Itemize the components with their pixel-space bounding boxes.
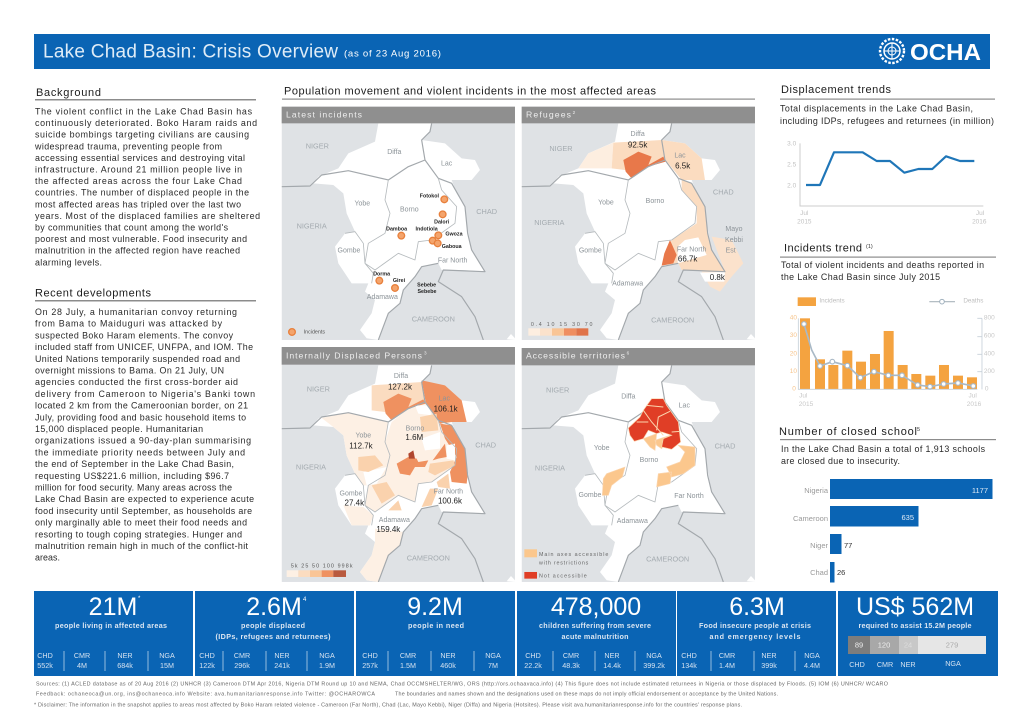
combo chart: 400 bbox=[984, 351, 995, 358]
recent developments paragraph: overnight missions to Bama. On 21 July, UN bbox=[35, 366, 224, 376]
incident place labels: Indotiola bbox=[416, 227, 438, 233]
stat: people displaced: 241k bbox=[274, 661, 290, 670]
background paragraph: most affected areas has tripled over the last two bbox=[35, 199, 241, 209]
refugee choropleth bbox=[578, 140, 743, 292]
map panel: latest incidents: CHAD bbox=[476, 207, 497, 216]
map panel: accessible territories: CAMEROON bbox=[646, 554, 689, 563]
line chart: 2.5 bbox=[787, 162, 797, 169]
map panel: internally displaced persons: NIGER bbox=[307, 384, 330, 393]
stat: people displaced: 122k bbox=[199, 661, 215, 670]
stat: children with severe acute malnutrition: 22.2k bbox=[524, 661, 542, 670]
map panel: accessible territories: Diffa bbox=[621, 394, 636, 401]
line chart: 2.0 bbox=[787, 183, 797, 190]
map panel: internally displaced persons: Adamawa bbox=[379, 517, 410, 524]
line chart: 2016 bbox=[972, 218, 987, 225]
map panel: refugees: 0.8k bbox=[710, 273, 725, 282]
heading: population movement: Population movement and violent incidents in the most affected areas bbox=[284, 86, 656, 98]
combo chart: 20 bbox=[790, 350, 797, 357]
recent developments paragraph: areas. bbox=[35, 553, 60, 563]
footnotes bbox=[34, 682, 888, 708]
map panel: refugees: CHAD bbox=[713, 187, 734, 196]
stat: people displaced bbox=[195, 591, 354, 676]
background paragraph: years. Most of the displaced families are sheltered bbox=[35, 211, 260, 221]
recent developments paragraph: July, providing food and basic household items to bbox=[35, 412, 246, 422]
legend: with restrictions bbox=[539, 560, 589, 566]
map panel: refugees: Refugees bbox=[526, 110, 572, 120]
combo chart: 2015 bbox=[799, 401, 814, 408]
map panel: refugees: Est bbox=[726, 248, 736, 255]
recent developments paragraph: malnutrition remain high in much of the conflict-hit bbox=[35, 541, 249, 551]
stat: people in need: 9.2M bbox=[407, 593, 463, 621]
map panel: accessible territories: Lac bbox=[679, 402, 690, 409]
bar chart: Cameroon bbox=[793, 514, 828, 523]
recent developments paragraph: Lake Chad Basin are expected to experience acute bbox=[35, 494, 254, 504]
line chart bbox=[787, 141, 987, 225]
map panel: internally displaced persons: Far North bbox=[434, 488, 463, 495]
incident place labels: Fotokol bbox=[420, 194, 439, 200]
funding stacked bar: 279 bbox=[946, 640, 958, 650]
stat: people displaced: (IDPs, refugees and returnees) bbox=[216, 632, 331, 641]
map panel: internally displaced persons: 1.6M bbox=[405, 433, 423, 442]
combo chart bbox=[790, 297, 995, 408]
description: Total displacements in the Lake Chad Basin, bbox=[780, 104, 973, 114]
background paragraph: widespread trauma, preventing people from bbox=[34, 141, 222, 151]
header banner bbox=[34, 34, 990, 69]
map panel: internally displaced persons: CAMEROON bbox=[407, 554, 450, 563]
combo chart: Jul bbox=[799, 393, 807, 400]
stat: people in need: 460k bbox=[440, 661, 456, 670]
background paragraph: by communities that count among the world's bbox=[35, 222, 229, 232]
map panel: latest incidents: Yobe bbox=[354, 200, 370, 207]
background paragraph: The violent conflict in the Lake Chad Basin has bbox=[35, 106, 253, 116]
stat: funding required: NER bbox=[900, 660, 916, 669]
stat: people in need: 7M bbox=[488, 661, 498, 670]
access shading bbox=[602, 399, 695, 495]
legend bbox=[528, 322, 593, 336]
heading: Displacement trends bbox=[781, 84, 892, 96]
map panel: latest incidents: Latest incidents bbox=[286, 110, 363, 120]
map panel: refugees bbox=[522, 107, 755, 340]
combo chart: 30 bbox=[790, 332, 797, 339]
recent developments paragraph: the end of September in the Lake Chad Basin, bbox=[35, 459, 234, 469]
panel: incidents trend: (1) bbox=[866, 244, 873, 250]
combo chart: Deaths bbox=[963, 298, 983, 305]
stat: food insecure people: 134k bbox=[681, 661, 697, 670]
map panel: refugees: Diffa bbox=[631, 131, 645, 138]
recent developments paragraph: resorting to tough coping strategies. Hunger and bbox=[35, 529, 242, 539]
stat: food insecure people: 6.3M bbox=[729, 593, 785, 621]
stat: people in affected areas: NGA bbox=[159, 651, 175, 660]
panel: displacement trends: including IDPs, refugees and returnees (in million) bbox=[780, 116, 994, 126]
stat: children with severe acute malnutrition: 14.4k bbox=[603, 661, 621, 670]
map panel: accessible territories bbox=[522, 348, 755, 582]
stat: people displaced: 1.9M bbox=[319, 661, 335, 670]
map panel: latest incidents: NIGERIA bbox=[297, 221, 327, 230]
map panel: internally displaced persons: Borno bbox=[406, 426, 424, 433]
stat: people in affected areas: NER bbox=[117, 651, 133, 660]
legend bbox=[287, 564, 353, 577]
stat: children with severe acute malnutrition: CMR bbox=[563, 651, 579, 660]
panel: background text bbox=[34, 87, 260, 267]
recent developments paragraph: from Bama to Maiduguri was attacked by bbox=[35, 319, 223, 329]
panel: closed schools: 5 bbox=[917, 427, 920, 433]
background paragraph: alarming levels. bbox=[35, 257, 102, 267]
map panel: refugees: Kebbi bbox=[725, 237, 743, 244]
legend bbox=[524, 549, 608, 579]
stat: funding required: required to assist 15.2M people bbox=[858, 621, 972, 630]
map panel: latest incidents: Adamawa bbox=[367, 294, 398, 301]
footnotes: Sources: (1) ACLED database as of 20 Aug 2016 (2) UNHCR (3) Cameroon DTM Apr 2016, Nigeria DTM Round up 10 and NEMA, Chad OCCMSHELTER/WG, ORS (http://ors.ochaavaca.info) (4) This figure does not include estimated returnees in Nigeria or those displaced by Floods. (5) IOM (6) UNHCR/ WCARO bbox=[36, 682, 888, 688]
stat: funding required: US$ 562M bbox=[856, 593, 974, 621]
incident place labels: Damboa bbox=[386, 227, 407, 233]
panel: displacement trends bbox=[780, 84, 995, 225]
stat: people in affected areas: 684k bbox=[117, 661, 133, 670]
combo chart: 200 bbox=[984, 368, 995, 375]
IDP choropleth bbox=[322, 380, 468, 582]
heading: Incidents trend bbox=[784, 242, 862, 254]
incident markers bbox=[376, 196, 448, 291]
stat: food insecure people: and emergency levels bbox=[710, 632, 800, 641]
funding stacked bar: 24 bbox=[904, 640, 912, 650]
map panel: internally displaced persons bbox=[282, 347, 515, 582]
stat: food insecure people bbox=[677, 591, 836, 676]
heading: Background bbox=[36, 87, 101, 99]
map panel: refugees: Yobe bbox=[598, 199, 614, 206]
line chart: Jul bbox=[976, 210, 984, 217]
heading: Recent developments bbox=[35, 288, 152, 300]
icon: UN emblem bbox=[880, 39, 904, 63]
recent developments paragraph: million for food security. Many areas across the bbox=[35, 482, 232, 492]
combo chart: Jul bbox=[968, 393, 977, 400]
stat: people in affected areas: CMR bbox=[74, 651, 90, 660]
recent developments paragraph: the immediate priority needs between July and bbox=[35, 447, 245, 457]
legend: 5k 25 50 100 998k bbox=[291, 564, 353, 570]
stat: people displaced: NGA bbox=[319, 651, 335, 660]
bar chart: 77 bbox=[844, 541, 852, 550]
stat: people in affected areas: * bbox=[138, 596, 141, 602]
background paragraph: infrastructure. Around 21 million people live in bbox=[35, 164, 242, 174]
bar chart: Niger bbox=[810, 541, 828, 550]
date: (as of 23 Aug 2016) bbox=[344, 48, 441, 60]
map panel: accessible territories: 6 bbox=[627, 351, 630, 356]
map panel: latest incidents: Gombe bbox=[338, 248, 361, 255]
map panel: refugees: 92.5k bbox=[628, 140, 647, 149]
map panel: internally displaced persons: Gombe bbox=[340, 490, 363, 497]
map panel: internally displaced persons: 127.2k bbox=[388, 382, 412, 391]
incident place labels bbox=[373, 194, 463, 295]
map panel: accessible territories: NIGER bbox=[546, 386, 569, 395]
stat: children with severe acute malnutrition: CHD bbox=[525, 651, 541, 660]
map panel: internally displaced persons: Lac bbox=[439, 396, 450, 403]
map panel: refugees: NIGER bbox=[549, 144, 573, 153]
panel: incidents trend bbox=[780, 242, 996, 408]
recent developments paragraph: food insecurity until September, as households are bbox=[35, 506, 252, 516]
recent developments paragraph: 15,000 displaced people. Humanitarian bbox=[35, 424, 203, 434]
OCHA logo text: OCHA bbox=[910, 39, 981, 65]
incident place labels: Dorma bbox=[373, 272, 390, 278]
stat: funding required: NGA bbox=[945, 659, 961, 668]
map panel: accessible territories: NIGERIA bbox=[535, 464, 565, 473]
stat: food insecure people: 399k bbox=[761, 661, 777, 670]
stat: people in need: 1.5M bbox=[400, 661, 416, 670]
stat: people in need: 257k bbox=[362, 661, 378, 670]
incident place labels: Girei bbox=[393, 278, 406, 284]
stat: children with severe acute malnutrition: 399.2k bbox=[643, 661, 665, 670]
description: In the Lake Chad Basin a total of 1,913 schools bbox=[781, 444, 986, 454]
background paragraph: continuously deteriorated. Boko Haram raids and bbox=[35, 118, 257, 128]
stat: funding required bbox=[838, 591, 998, 676]
stat: people in affected areas: CHD bbox=[37, 651, 53, 660]
stat: people in affected areas: 552k bbox=[37, 661, 53, 670]
map panel: latest incidents: CAMEROON bbox=[412, 315, 455, 324]
panel: incidents trend: the Lake Chad Basin since July 2015 bbox=[781, 272, 940, 282]
map panel: refugees: Borno bbox=[646, 198, 664, 205]
map panel: refugees: Adamawa bbox=[612, 280, 643, 287]
map panel: latest incidents: Diffa bbox=[387, 149, 402, 156]
map panel: latest incidents: Far North bbox=[438, 258, 468, 265]
incident place labels: Sebebe bbox=[417, 283, 436, 289]
background paragraph: malnutrition in the affected region have reached bbox=[35, 246, 240, 256]
combo chart: 0 bbox=[792, 385, 796, 392]
legend: 0.4 10 15 30 70 bbox=[531, 322, 593, 328]
combo chart: 40 bbox=[790, 315, 797, 322]
combo chart: 0 bbox=[985, 385, 989, 392]
map panel: accessible territories: Accessible territories bbox=[526, 351, 626, 361]
stat: funding required: CHD bbox=[849, 660, 865, 669]
stat: people displaced: NER bbox=[274, 651, 290, 660]
stat: children with severe acute malnutrition: NER bbox=[604, 651, 620, 660]
bar chart: Chad bbox=[810, 568, 828, 577]
stat: children with severe acute malnutrition: acute malnutrition bbox=[562, 632, 628, 641]
map panel: accessible territories: Gombe bbox=[579, 492, 602, 499]
map panel: refugees: Far North bbox=[677, 246, 707, 253]
map panel: internally displaced persons: 100.6k bbox=[438, 496, 462, 505]
map panel: internally displaced persons: 27.4k bbox=[345, 499, 364, 508]
map panel: internally displaced persons: 159.4k bbox=[376, 525, 400, 534]
stat: food insecure people: 1.4M bbox=[719, 661, 735, 670]
map panel: accessible territories: Far North bbox=[674, 493, 704, 500]
map panel: latest incidents: Lac bbox=[441, 160, 453, 167]
background paragraph: the affected areas across the four Lake Chad bbox=[35, 176, 242, 186]
stat: people displaced: CMR bbox=[234, 651, 250, 660]
legend: Not accessible bbox=[539, 573, 587, 579]
legend: Incidents bbox=[304, 330, 325, 336]
map panel: latest incidents: Borno bbox=[400, 207, 419, 214]
title: Lake Chad Basin: Crisis Overview bbox=[43, 42, 338, 62]
recent developments paragraph: agencies conducted the first cross-border aid bbox=[35, 377, 238, 387]
stat: food insecure people: CHD bbox=[681, 651, 697, 660]
recent developments paragraph: only marginally able to meet their food needs and bbox=[35, 518, 247, 528]
stat: food insecure people: 4.4M bbox=[804, 661, 820, 670]
recent developments paragraph: On 28 July, a humanitarian convoy returning bbox=[35, 307, 237, 317]
footnotes: Feedback: ochaneoca@un.org, ins@ochaneoca.info Website: ava.humanitarianresponse.info Twitter: @OCHAROWCA bbox=[36, 692, 375, 698]
combo chart: Incidents bbox=[819, 298, 845, 305]
map panel: accessible territories: CHAD bbox=[715, 442, 735, 451]
map panel: accessible territories: Yobe bbox=[594, 445, 610, 452]
recent developments paragraph: delivery from Cameroon to Nigeria's Banki town bbox=[35, 389, 255, 399]
bar chart: Nigeria bbox=[804, 486, 829, 495]
recent developments paragraph: requesting US$221.6 million, including $96.7 bbox=[35, 471, 229, 481]
stat: funding required: CMR bbox=[877, 660, 893, 669]
stat: food insecure people: NGA bbox=[804, 651, 820, 660]
background paragraph: poorest and most vulnerable. Food insecurity and bbox=[35, 234, 247, 244]
map panel: internally displaced persons: Diffa bbox=[394, 373, 408, 380]
combo chart: 10 bbox=[790, 368, 797, 375]
stat: people displaced: 296k bbox=[234, 661, 250, 670]
panel: recent developments bbox=[35, 288, 256, 563]
stat: food insecure people: Food insecure people at crisis bbox=[699, 621, 811, 630]
background paragraph bbox=[34, 106, 260, 267]
incident place labels: Gwoza bbox=[445, 232, 463, 238]
stat: children with severe acute malnutrition: children suffering from severe bbox=[539, 621, 651, 630]
stat: people in need: people in need bbox=[408, 621, 464, 630]
map panel: refugees: Gombe bbox=[579, 248, 602, 255]
map panel: internally displaced persons: 112.7k bbox=[349, 442, 373, 451]
map panel: accessible territories: Adamawa bbox=[617, 518, 648, 525]
footnotes: The boundaries and names shown and the designations used on these maps do not imply official endorsement or acceptance by the United Nations. bbox=[395, 692, 778, 698]
map panel: latest incidents bbox=[282, 107, 515, 340]
stat: food insecure people: CMR bbox=[719, 651, 735, 660]
recent developments paragraph: located 2 km from the Cameroonian border, on 21 bbox=[35, 401, 248, 411]
line chart: 3.0 bbox=[787, 141, 797, 148]
stat: people in affected areas: 15M bbox=[160, 661, 174, 670]
stat: people in need: NER bbox=[440, 651, 456, 660]
stat: people in need bbox=[356, 591, 515, 676]
map panel: refugees: CAMEROON bbox=[651, 316, 694, 325]
combo chart: 600 bbox=[984, 333, 995, 340]
stat: children with severe acute malnutrition: 48.3k bbox=[562, 661, 580, 670]
funding stacked bar: 89 bbox=[855, 640, 863, 650]
bar chart: 26 bbox=[837, 568, 845, 577]
panel: closed schools: are closed due to insecurity. bbox=[781, 456, 900, 466]
background paragraph: accessing essential services and destroying vital bbox=[35, 153, 245, 163]
map panel: refugees: 66.7k bbox=[678, 255, 697, 264]
map panel: refugees: Mayo bbox=[725, 226, 743, 233]
map panel: internally displaced persons: 106.1k bbox=[434, 404, 458, 413]
background paragraph: countries. The number of displaced people in the bbox=[35, 188, 249, 198]
incident place labels: Gaboua bbox=[442, 244, 462, 250]
map panel: refugees: 2 bbox=[573, 110, 576, 115]
map panel: internally displaced persons: CHAD bbox=[475, 440, 496, 449]
stat: children with severe acute malnutrition bbox=[517, 591, 676, 676]
stat: people in need: NGA bbox=[485, 651, 501, 660]
combo chart: 800 bbox=[984, 315, 995, 322]
stat: people in need: CHD bbox=[362, 651, 378, 660]
stat: people in need: CMR bbox=[400, 651, 416, 660]
map panel: latest incidents: NIGER bbox=[306, 141, 329, 150]
map panel: accessible territories: Borno bbox=[640, 457, 658, 464]
combo chart: 2016 bbox=[967, 401, 982, 408]
stat: people displaced: CHD bbox=[199, 651, 215, 660]
footnotes: * Disclaimer: The information in the snapshot applies to areas most affected by Boko Haram related violence - Cameroon (Far North), Chad (Lac, Mayo Kebbi), Niger (Diffa) and Nigeria (Hotsites). Please visit ava.humanitarianresponse.info for the countries' response plans. bbox=[34, 702, 742, 708]
stat: people in affected areas: 21M bbox=[89, 593, 137, 621]
stat: people in affected areas bbox=[34, 591, 193, 676]
map panel: refugees: Lac bbox=[674, 152, 686, 159]
map panel: internally displaced persons: Internally Displaced Persons bbox=[286, 351, 423, 361]
recent developments paragraph bbox=[35, 307, 255, 563]
map panel: refugees: 6.5k bbox=[675, 162, 690, 171]
legend bbox=[289, 329, 325, 336]
recent developments paragraph: suspected Boko Haram elements. The convoy bbox=[35, 330, 234, 340]
incident place labels: Sebebe bbox=[418, 289, 436, 295]
bar chart: 1177 bbox=[972, 486, 988, 495]
stat: people displaced: 2.6M bbox=[246, 593, 302, 621]
map panel: internally displaced persons: NIGERIA bbox=[296, 462, 326, 471]
bar chart bbox=[793, 479, 992, 582]
stat: people displaced: 4 bbox=[303, 597, 307, 603]
stat: people in affected areas: 4M bbox=[77, 661, 87, 670]
stat: children with severe acute malnutrition: NGA bbox=[646, 651, 662, 660]
heading: Number of closed school bbox=[779, 426, 917, 438]
map panel: internally displaced persons: Yobe bbox=[355, 432, 371, 439]
recent developments paragraph: United Nations temporarily suspended road and bbox=[35, 354, 240, 364]
background paragraph: suicide bombings targeting civilians are causing bbox=[35, 130, 249, 140]
funding stacked bar bbox=[848, 636, 986, 654]
stat: food insecure people: NER bbox=[761, 651, 777, 660]
map panel: internally displaced persons: 3 bbox=[424, 351, 427, 356]
stat: children with severe acute malnutrition: 478,000 bbox=[551, 593, 641, 621]
stat: people in affected areas: people living in affected areas bbox=[55, 621, 167, 630]
panel: closed schools bbox=[779, 426, 996, 582]
recent developments paragraph: included staff from UNICEF, UNFPA, and IOM. The bbox=[35, 342, 253, 352]
incident place labels: Dalori bbox=[434, 220, 450, 226]
funding stacked bar: 120 bbox=[878, 640, 890, 650]
stat: people displaced: people displaced bbox=[241, 621, 305, 630]
legend: Main axes accessible bbox=[539, 552, 608, 558]
line chart: 2015 bbox=[797, 218, 812, 225]
description: Total of violent incidents and deaths reported in bbox=[781, 260, 984, 270]
map panel: refugees: NIGERIA bbox=[534, 218, 565, 227]
recent developments paragraph: organizations issued a 90-day-plan summarising bbox=[35, 436, 251, 446]
bar chart: 635 bbox=[901, 513, 914, 522]
line chart: Jul bbox=[800, 210, 808, 217]
